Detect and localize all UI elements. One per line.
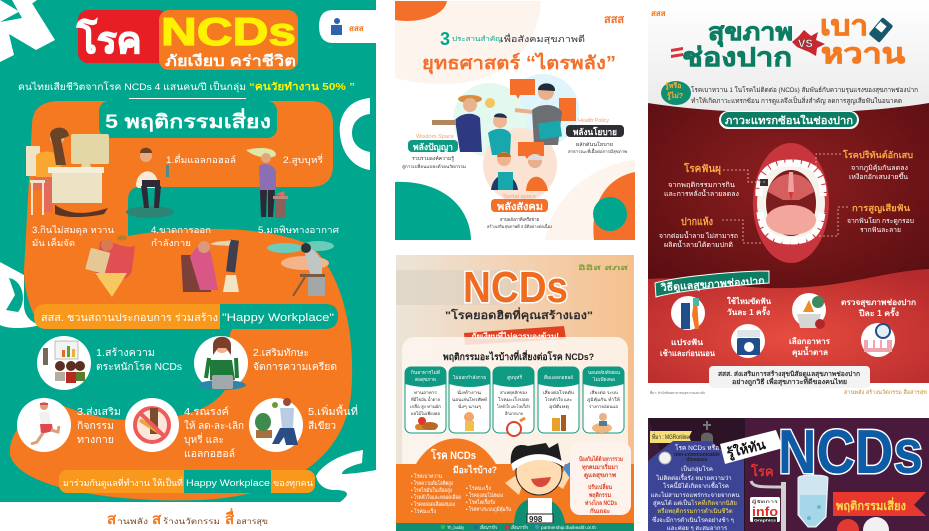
risk label 4: 4.ขาดการออก (151, 225, 211, 235)
source tag: ที่มา : MGRonline (652, 433, 690, 441)
heading ribbon: oral care (655, 271, 769, 297)
callout: การสูญเสียฟัน: จากฟันโยก กระดูกรอบ (847, 217, 914, 225)
callout: การสูญเสียฟัน: การสูญเสียฟัน (852, 203, 911, 214)
lower icons (837, 517, 889, 531)
label: พลังนโยบาย: สาธารณะที่เอื้อต่อการมีสุขภาพ (568, 148, 627, 155)
behaviour cards: เสี่ยงต่อ ระบบ (590, 389, 618, 395)
know-or-not badge: รู้หรือ (665, 81, 681, 91)
label: พลังนโยบาย: Health Policy (578, 118, 609, 124)
care label: ตรวจสุขภาพ (841, 298, 916, 318)
action 2 text (253, 348, 337, 373)
info graphics badge: Graphics (754, 518, 777, 522)
behaviour cards: นอนเล่นโทรศัพท์ (452, 396, 487, 402)
banner: closing message: ของทุกคน (273, 478, 313, 489)
heading: โรค NCDs มีอะไรบ้าง: มีอะไรบ้าง? (453, 464, 497, 475)
contact footer (396, 523, 634, 531)
behaviour cards: สาเหตุหลักของ (500, 390, 527, 396)
care label: ตรวจสุขภาพ: ตรวจสุขภาพช่องปาก (841, 298, 916, 308)
question: พฤติกรรมอะไรบ้างที่เสี่ยงต่อโรค NCDs? (443, 349, 594, 363)
callout: โรคฟันผุ (664, 162, 766, 198)
contact footer: เพื่อนภารกิจ (480, 524, 497, 531)
info body: โรคนี้มิได้เกิดจากเชื้อโรค (663, 480, 729, 490)
advice card: ปรับเปลี่ยน (588, 482, 613, 491)
footer tagline: านพลัง (117, 517, 148, 526)
action 1 text: 1.สร้างความ (96, 347, 155, 359)
heading line 1 (440, 29, 585, 49)
heading line 1: ประสานสำคัญ (452, 35, 503, 43)
risk label 4 (151, 225, 211, 248)
red ribbon: ภัยเงียบที่ไม่ควรมองข้าม! (471, 330, 559, 341)
VS badge: VS (798, 38, 813, 50)
label: พลังปัญญา: พลังปัญญา (413, 142, 453, 153)
panel: โรค NCDs poster (0, 0, 376, 528)
label: พลังปัญญา: สู่การเปลี่ยนแปลงด้วยนวัตกรรม (402, 163, 466, 170)
banner: Happy Workplace invitation: "Happy Workplace" (222, 312, 334, 324)
illustration: person in air pollution (267, 241, 334, 296)
care label: ไหมขัดฟัน: วันละ 1 ครั้ง (727, 306, 770, 317)
advice card: ห่างไกล NCDs (585, 499, 618, 507)
action 2 text: 2.เสริมทักษะ (253, 348, 309, 359)
cartoon runner boy (505, 443, 580, 524)
icon: gravestone (701, 421, 713, 449)
action 4 text (184, 406, 244, 460)
risk label 3 (32, 225, 114, 248)
orange blob background (10, 101, 352, 500)
note card (709, 366, 870, 388)
action 4 text: ให้ ลด-ละ-เลิก (184, 420, 244, 432)
icon: no smoking or drinking sign (125, 398, 179, 452)
illustration: policy man (510, 79, 576, 145)
panel: ยุทธศาสตร์ ไตรพลัง poster (395, 1, 635, 241)
logo: สสส (604, 14, 624, 26)
callout: โรคปริทันต์อักเสบ: จากภูมิคุ้มกันลดลง (851, 164, 908, 172)
care label: อาหาร (789, 336, 831, 358)
footer tagline: ร้างนวัตกรรม (163, 517, 220, 526)
source and tagline footer (650, 388, 927, 396)
banner: closing message: มาร่วมกันดูแลที่ทำงาน ให้เป็นที่ (63, 476, 183, 489)
ribbon: รู้ให้ทัน: รู้ให้ทัน (725, 436, 767, 462)
heading: โรค NCDs มีอะไรบ้าง (430, 448, 497, 475)
callout: การสูญเสียฟัน (815, 203, 914, 236)
label: พลังนโยบาย: พลังนโยบาย (573, 126, 617, 137)
info body: สู่คนได้ แต่เป็นโรคที่เกิดจากนิสัย (653, 498, 737, 507)
behaviour cards: โรคหัวใจ และโรคเรื้อรัง (497, 403, 530, 409)
icon: toothbrush and toothpaste (671, 296, 705, 330)
label: พลังนโยบาย (566, 118, 627, 155)
advice card: พฤติกรรม (589, 491, 611, 499)
card icons (415, 412, 612, 436)
logos: อิอิส สภส (577, 264, 629, 272)
illustration: man drinking (126, 148, 174, 218)
info heading: โรค NCDs หรือ (675, 444, 719, 452)
info heading (674, 444, 720, 463)
list of NCD diseases: • โรคไตเรื้อรัง (466, 498, 495, 506)
subtitle: คนไทยเสียชีวิตจากโรค NCDs 4 แสนคน/ปี เป็นกลุ่ม (18, 80, 246, 93)
list of NCD diseases: • โรคเบาหวาน (411, 472, 442, 480)
behaviour cards: ผลไม้ไม่เพียงพอ (411, 411, 440, 416)
intro text: โรคเบาหวาน 1 ในโรคไม่ติดต่อ (NCDs) สัมพันธ์กับความรุนแรงของสุขภาพช่องปาก (691, 86, 918, 94)
behaviour cards: อุบัติเหตุ (549, 404, 569, 410)
list of NCD diseases: • โรคหัวใจและหลอดเลือด (411, 493, 461, 501)
behaviour cards: นั่งทำงาน (457, 389, 481, 395)
action 3 text (77, 407, 121, 446)
info body: ไม่ติดต่อเรื้อรัง หมายความว่า (655, 472, 732, 482)
illustration: social workers (491, 142, 548, 191)
source tag (650, 431, 692, 443)
intro text (691, 86, 918, 105)
list of NCD diseases: • โรคหลอดเลือดสมอง (411, 500, 455, 508)
note card: อย่างถูกวิธี เพื่อสุขภาวะที่ดีของคนไทย (732, 376, 847, 387)
heading: 5 พฤติกรรมเสี่ยง (99, 101, 277, 138)
icon: dental floss (731, 324, 765, 358)
logo badge (319, 10, 376, 43)
behaviour cards: โรคมะเร็งปอด (498, 395, 529, 402)
risk label 5: 5.มลพิษทางอากาศ (258, 225, 339, 235)
action 1 text (96, 347, 182, 373)
IV drip illustration (751, 475, 828, 531)
title: โรค NCDs: ภัยเงียบ คร่าชีวิต (165, 52, 296, 70)
pill icon (659, 452, 671, 464)
illustration: overweight person eating (85, 236, 135, 297)
contact footer: Th_buddy (447, 525, 464, 531)
illustration: tired person at screen (181, 240, 239, 292)
panel: สุขภาพช่องปาก vs เบาหวาน poster (648, 0, 929, 396)
heading line 1: เพื่อสังคมสุขภาพดี (500, 33, 585, 45)
label: พลังสังคม (487, 194, 552, 230)
banner: Happy Workplace invitation: สสส. ชวนสถานประกอบการ ร่วมสร้าง (41, 312, 218, 324)
note card: สสส. ส่งเสริมการสร้างสุขนิสัยดูแลสุขภาพช่องปาก (718, 369, 860, 379)
know-or-not badge (661, 81, 691, 105)
title: โรค NCDs (76, 10, 298, 70)
heading pill: complications (719, 111, 859, 129)
list of NCD diseases: • โรคถุงลมโป่งพอง (466, 491, 503, 499)
logo: สสส (651, 9, 666, 18)
label: พลังนโยบาย: ผลักดันนโยบาย (576, 141, 613, 148)
subtitle: "โรคยอดฮิตที่คุณสร้างเอง" (445, 307, 593, 323)
info body (650, 464, 740, 531)
behaviour cards: ต่อสุขภาพ (415, 377, 436, 383)
info graphics badge: info (752, 504, 778, 519)
risk label 3: 3.กินไม่สมดุล หวาน (32, 225, 114, 236)
label: พลังสังคม: สานพลังภาคีเครือข่าย (500, 216, 539, 223)
heading ribbon: oral care: วิธีดูแลสุขภาพช่องปาก (660, 275, 765, 295)
callout: ปากแห้ง: จากต่อมน้ำลาย ไม่สามารถ (659, 231, 738, 240)
risk label 1: 1.ดื่มแอลกอฮอล์ (166, 153, 236, 165)
title: สุขภาพ ช่องปาก: ช่องปาก (682, 42, 792, 72)
icon: food basket (792, 293, 826, 329)
cartoon runner boy: 998 (529, 515, 543, 524)
behaviour cards (405, 367, 624, 433)
footer tagline: อสารสุข (236, 517, 268, 526)
action 1 text: ตระหนักโรค NCDs (96, 360, 182, 373)
behaviour cards: ภูมิคุ้มกัน ทำให้ (587, 397, 620, 403)
banner: closing message (59, 470, 315, 493)
care label: ตรวจสุขภาพ: ปีละ 1 ครั้ง (858, 307, 899, 318)
contact footer: partnership.thaihealth.or.th (541, 525, 596, 531)
footer tagline: สื่ (225, 508, 235, 528)
behaviour cards: ร่างกายอ่อนแอ (589, 404, 618, 409)
behaviour cards: ทานอาหาร (414, 390, 438, 395)
behaviour cards: ไม่เพียงพอ (592, 376, 615, 382)
advice card: กันเถอะ (590, 507, 610, 515)
label: พลังปัญญา (402, 134, 466, 170)
red ribbon (464, 326, 566, 345)
title: เบา หวาน: หวาน (821, 38, 905, 69)
list of NCD diseases: • โรคมะเร็ง (466, 484, 491, 492)
callout: การสูญเสียฟัน: รากฟันละลาย (860, 226, 901, 234)
label: พลังสังคม: พลังสังคม (497, 201, 543, 213)
icon: calm woman circle (194, 336, 248, 390)
behaviour cards: ดื่มแอลกอฮอล์ (544, 374, 573, 380)
callout: ปากแห้ง: ปากแห้ง (681, 216, 713, 228)
label: พลังปัญญา: รวบรวมองค์ความรู้ (412, 155, 454, 162)
care label: ไหมขัดฟัน (727, 296, 772, 317)
footer tagline: ส (107, 511, 117, 528)
action 4 text: แอลกอฮอล์ (184, 448, 235, 460)
action 5 text: สีเขียว (308, 420, 336, 432)
risk label 3: มัน เค็มจัด (32, 236, 75, 248)
banner: closing message: Happy Workplace (186, 478, 270, 488)
panel: รู้ให้ทัน NCDs poster (648, 418, 929, 531)
care label: ไหมขัดฟัน: ใช้ไหมขัดฟัน (727, 296, 772, 306)
callout: โรคฟันผุ: จากพฤติกรรมการกิน (668, 181, 736, 189)
title NCDs: NCDs (463, 263, 568, 312)
behaviour cards: ที่มีไขมัน น้ำตาล (411, 396, 440, 402)
info body: หรือพฤติกรรมการดำเนินชีวิต (657, 507, 733, 515)
list of NCD diseases: • โรคทางระบบภูมิคุ้มกัน (466, 505, 511, 513)
behaviour cards: สูบบุหรี่ (507, 374, 523, 381)
action 4 text: 4.รณรงค์ (184, 406, 229, 418)
title: สุขภาพ ช่องปาก: สุขภาพ (708, 19, 793, 48)
callout: ปากแห้ง: ผลิตน้ำลายได้ตามปกติ (664, 240, 733, 249)
callout: โรคฟันผุ: โรคฟันผุ (683, 162, 721, 175)
ribbon: รู้ให้ทัน (720, 430, 783, 464)
behaviour cards: เสี่ยงต่อโรคตับ (543, 389, 574, 395)
info heading: diseases (686, 457, 708, 463)
callout: โรคปริทันต์อักเสบ: โรคปริทันต์อักเสบ (842, 149, 913, 160)
action 3 text: ทางกาย (77, 435, 114, 446)
behaviour cards: นั่งๆ นานๆ (458, 403, 482, 409)
behaviour cards: กินอาหารไม่ดี (411, 369, 440, 375)
action 3 text: 3.ส่งเสริม (77, 407, 121, 418)
illustration: old farmer and child (432, 95, 511, 155)
behaviour cards: โรคหัวใจ และ (545, 396, 572, 402)
source and tagline footer: สานพลัง สร้างนวัตกรรม สื่อสารสุข (844, 388, 927, 396)
care label: อาหาร: เลือกอาหาร (789, 336, 831, 346)
advice card: ดูแลสุขภาพ (584, 472, 616, 480)
behaviour cards: อีกมากมาย (505, 411, 523, 416)
info body: และไม่สามารถแพร่กระจายจากคน (650, 491, 740, 499)
icon: presentation circle (37, 336, 91, 390)
orange section (396, 438, 634, 523)
title: สุขภาพ ช่องปาก (671, 19, 793, 72)
behaviour cards: เกลือ สูง ทานผัก (410, 403, 441, 410)
icon: gardener circle (249, 398, 303, 452)
source and tagline footer: ที่มา: สำนักทันตสาธารณสุข กรมอนามัย (650, 390, 705, 396)
care label: แปรงฟัน: แปรงฟัน (671, 338, 704, 347)
callout: โรคปริทันต์อักเสบ: เหงือกอักเสบง่ายขึ้น (849, 172, 909, 181)
icon: runner circle (17, 398, 71, 452)
illustration: man smoking (246, 148, 288, 218)
callout: ปากแห้ง (659, 216, 763, 249)
advice card (570, 442, 631, 515)
action 5 text (308, 404, 358, 432)
label: พลังสังคม: สร้างเสริมสุขภาพดี 4 มิติอย่างต่อเนื่อง (487, 223, 552, 230)
logo badge: สสส (349, 24, 364, 33)
risk label 2: 2.สูบบุหรี่ (283, 153, 323, 166)
red ribbon: พฤติกรรมเสี่ยง: พฤติกรรมเสี่ยง (836, 497, 906, 513)
action 4 text: บุหรี่ และ (184, 432, 224, 446)
label: โรค: โรค (750, 463, 774, 479)
callout: โรคปริทันต์อักเสบ (816, 149, 913, 181)
label: พลังสังคม: Social space (503, 194, 536, 200)
VS badge (792, 30, 825, 56)
white card (402, 337, 628, 492)
care label: แปรงฟัน (660, 338, 716, 358)
care label: อาหาร: คุมน้ำตาล (792, 346, 828, 358)
title: โรค NCDs: โรค (76, 18, 142, 61)
illustration: open mouth (753, 143, 829, 263)
banner: Happy Workplace invitation (34, 304, 338, 329)
info graphics badge: ผู้จัดการ (752, 499, 780, 505)
info graphics badge (750, 497, 780, 522)
advice card: ป้องกันได้ด้วยการรวม (579, 455, 623, 463)
advice card: ทุกคนมาเริ่มมา (582, 462, 618, 471)
intro text: ทำให้เกิดภาวะแทรกซ้อน การดูแลจึงเป็นสิ่งสำคัญ ลดการสูญเสียฟันในอนาคต (691, 96, 902, 105)
list of NCD diseases: • โรคความดันโลหิตสูง (411, 479, 453, 487)
highlighted subtitle: “คนวัยทำงาน 50% ” (249, 81, 355, 93)
icon: tooth check magnifier (861, 323, 895, 357)
list of NCD diseases: • โรคไขมันในเลือดสูง (411, 486, 452, 494)
title: โรค NCDs: NCDs (161, 11, 296, 54)
title: เบา หวาน (820, 10, 905, 69)
heading pill: complications: ภาวะแทรกซ้อนในช่องปาก (725, 114, 853, 127)
red ribbon: พฤติกรรมเสี่ยง (833, 492, 926, 516)
heading: โรค NCDs มีอะไรบ้าง: โรค NCDs (430, 448, 476, 462)
footer tagline (107, 508, 268, 528)
label: พลังปัญญา: Wisdom Space (416, 134, 454, 140)
info body: ซึ่งจะมีการดำเนินโรคอย่างช้า ๆ (652, 516, 734, 524)
illustration: three circles (453, 74, 579, 202)
info body: เป็นกลุ่มโรค (681, 464, 713, 473)
action 2 text: จัดการความเครียด (253, 361, 337, 373)
behaviour cards: นอนหลับพักผ่อน (588, 369, 621, 375)
blue info panel (648, 441, 744, 531)
action 3 text: กิจกรรม (77, 421, 114, 432)
action 5 text: 5.เพิ่มพื้นที่ (308, 404, 358, 418)
title: เบา หวาน: เบา (820, 10, 868, 41)
footer tagline: ส (152, 511, 162, 528)
info heading: non-communicable (674, 452, 720, 458)
care label: แปรงฟัน: เช้าและก่อนนอน (660, 348, 716, 358)
heading line 2: ยุทธศาสตร์ “ไตรพลัง” (422, 52, 616, 75)
heading line 1: 3 (440, 29, 450, 49)
panel: NCDs โรคยอดฮิต poster (396, 255, 634, 531)
risk label 4: กำลังกาย (151, 238, 191, 248)
behaviour cards: ไม่ออกกำลังกาย (452, 374, 486, 380)
callout: โรคฟันผุ: และการหลั่งน้ำลายลดลง (664, 189, 739, 198)
illustration: bearded man at computer (26, 128, 109, 217)
list of NCD diseases (411, 472, 511, 515)
heading: 5 พฤติกรรมเสี่ยง: 5 พฤติกรรมเสี่ยง (105, 108, 271, 133)
know-or-not badge: รู้ไม่? (667, 91, 683, 101)
contact footer: เพื่อนภารกิจ (511, 524, 528, 531)
list of NCD diseases: • โรคมะเร็ง (411, 507, 436, 515)
